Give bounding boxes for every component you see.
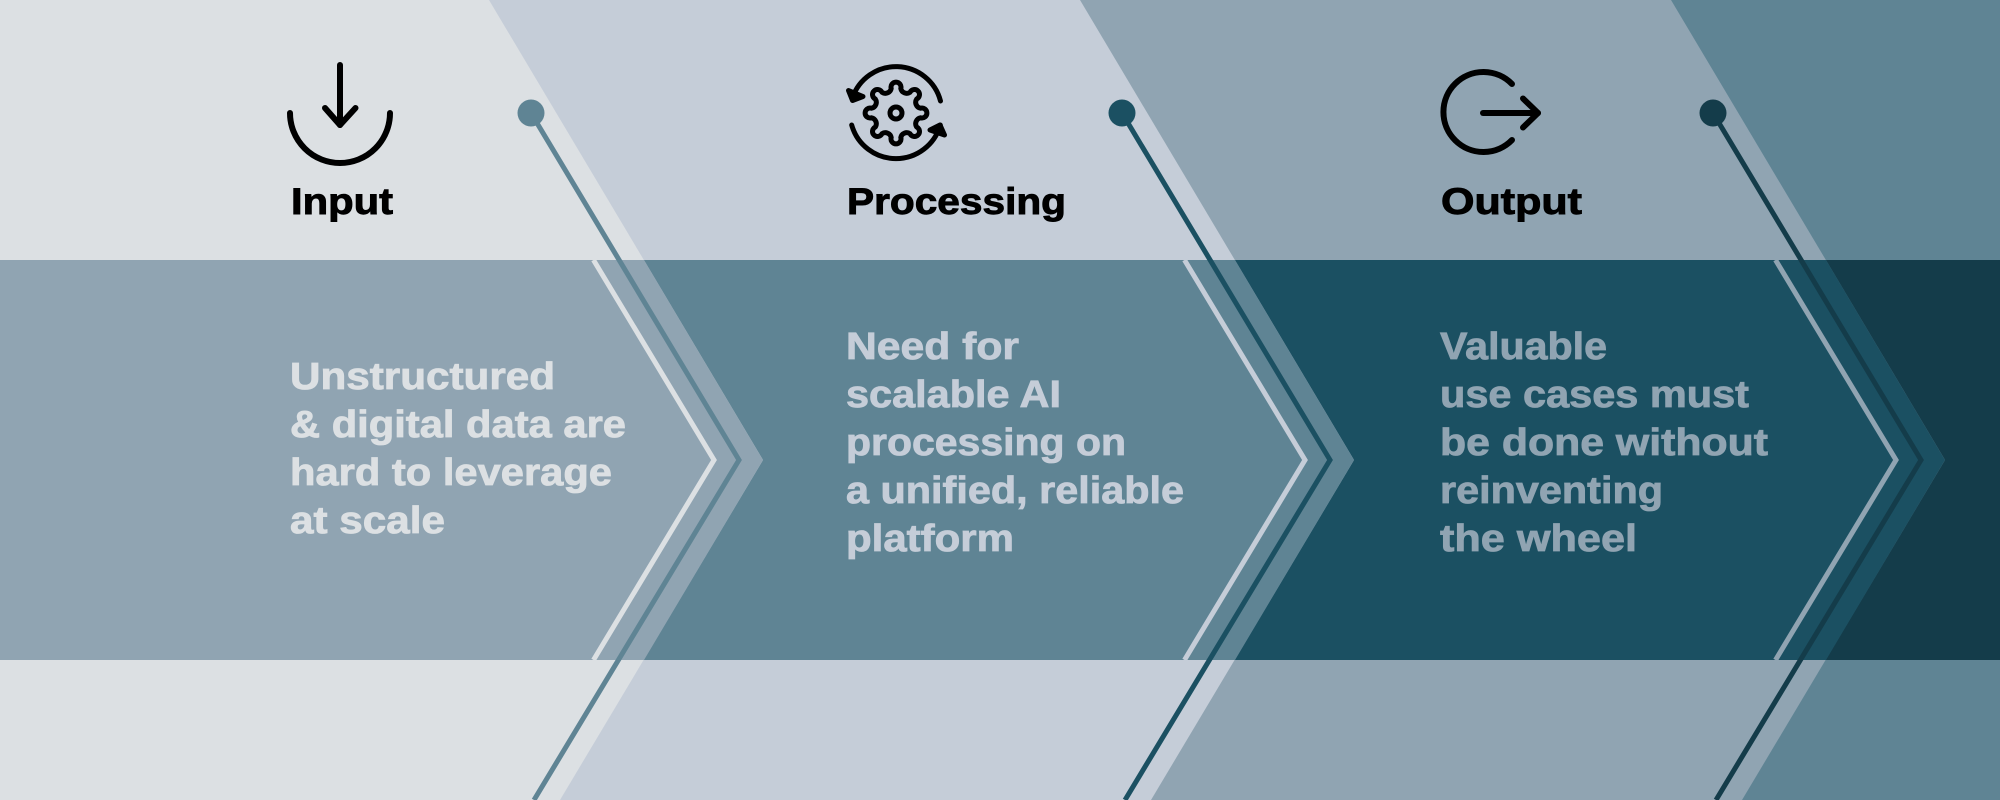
text block: output description xyxy=(1440,326,1768,560)
text block: input description xyxy=(290,356,626,542)
panel: input chevron xyxy=(0,0,763,800)
heading: Output: Output xyxy=(1441,181,1582,222)
text block: input description: & digital data are xyxy=(290,404,626,446)
text block: processing description: Need for xyxy=(846,326,1019,368)
icon: input arrow into bowl xyxy=(290,65,390,163)
heading: Processing: Processing xyxy=(847,181,1066,222)
text block: output description: Valuable xyxy=(1440,326,1607,368)
text block: output description: be done without xyxy=(1440,422,1768,464)
panel: processing chevron xyxy=(0,0,1354,800)
text block: processing description: a unified, reliable xyxy=(846,470,1184,512)
text block: processing description xyxy=(846,326,1184,560)
text block: processing description: processing on xyxy=(846,422,1126,464)
text block: processing description: platform xyxy=(846,518,1014,560)
text block: input description: hard to leverage xyxy=(290,452,612,494)
icon: output arrow leaving circle xyxy=(1443,72,1538,152)
text block: output description: reinventing xyxy=(1440,470,1663,512)
icon: processing gear with rotating arrows xyxy=(848,67,944,159)
text block: output description: use cases must xyxy=(1440,374,1749,416)
heading: Input: Input xyxy=(291,181,393,222)
text block: output description: the wheel xyxy=(1440,518,1637,560)
text block: input description: at scale xyxy=(290,500,445,542)
text block: input description: Unstructured xyxy=(290,356,555,398)
text block: processing description: scalable AI xyxy=(846,374,1061,416)
